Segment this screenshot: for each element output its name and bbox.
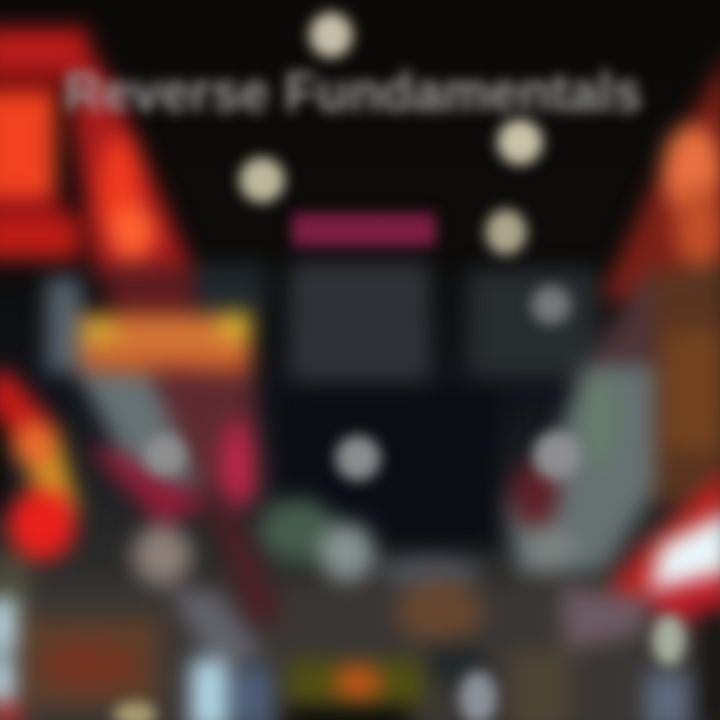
icon: top dot bbox=[309, 12, 353, 58]
icon: middle right dot bbox=[485, 209, 527, 255]
banner: orange heading bbox=[80, 312, 252, 378]
panel: bottom left brown card bbox=[0, 598, 160, 720]
panel: left gray diagonal card bbox=[75, 370, 260, 525]
icon: left red tower bbox=[0, 28, 210, 350]
icon: upper left dot bbox=[239, 157, 285, 203]
panel: right gray card bbox=[505, 365, 655, 575]
title: Reverse Fundamentals bbox=[64, 60, 642, 123]
icon: left red and yellow stripe bbox=[0, 368, 80, 561]
icon: bottom centre right dot bbox=[459, 671, 497, 720]
icon: pale bottom dot bbox=[113, 701, 157, 720]
icon: centre dot bbox=[335, 435, 381, 481]
panel: left beige and gray card bbox=[0, 490, 285, 665]
panel: right text block bbox=[468, 270, 596, 378]
badge: pink label bbox=[292, 213, 436, 247]
icon: left panel dot bbox=[144, 434, 186, 476]
panel: lower backdrop bbox=[0, 385, 720, 720]
icon: right orange tower bbox=[570, 50, 720, 510]
icon: upper right dot bbox=[497, 119, 543, 165]
panel: bottom centre brown card bbox=[396, 580, 484, 682]
panel: left text block bbox=[46, 265, 265, 373]
icon: bottom right dot bbox=[652, 614, 686, 666]
icon: right panel dot bbox=[531, 285, 571, 325]
panel: centre green card bbox=[260, 498, 480, 588]
icon: right red and white ribbon bbox=[560, 465, 720, 650]
icon: bottom right bars bbox=[510, 610, 720, 720]
icon: bottom blue bars bbox=[190, 660, 272, 720]
panel: centre text block bbox=[290, 262, 430, 382]
panel: bottom centre olive card bbox=[285, 660, 424, 720]
icon: right card dot bbox=[533, 431, 581, 479]
